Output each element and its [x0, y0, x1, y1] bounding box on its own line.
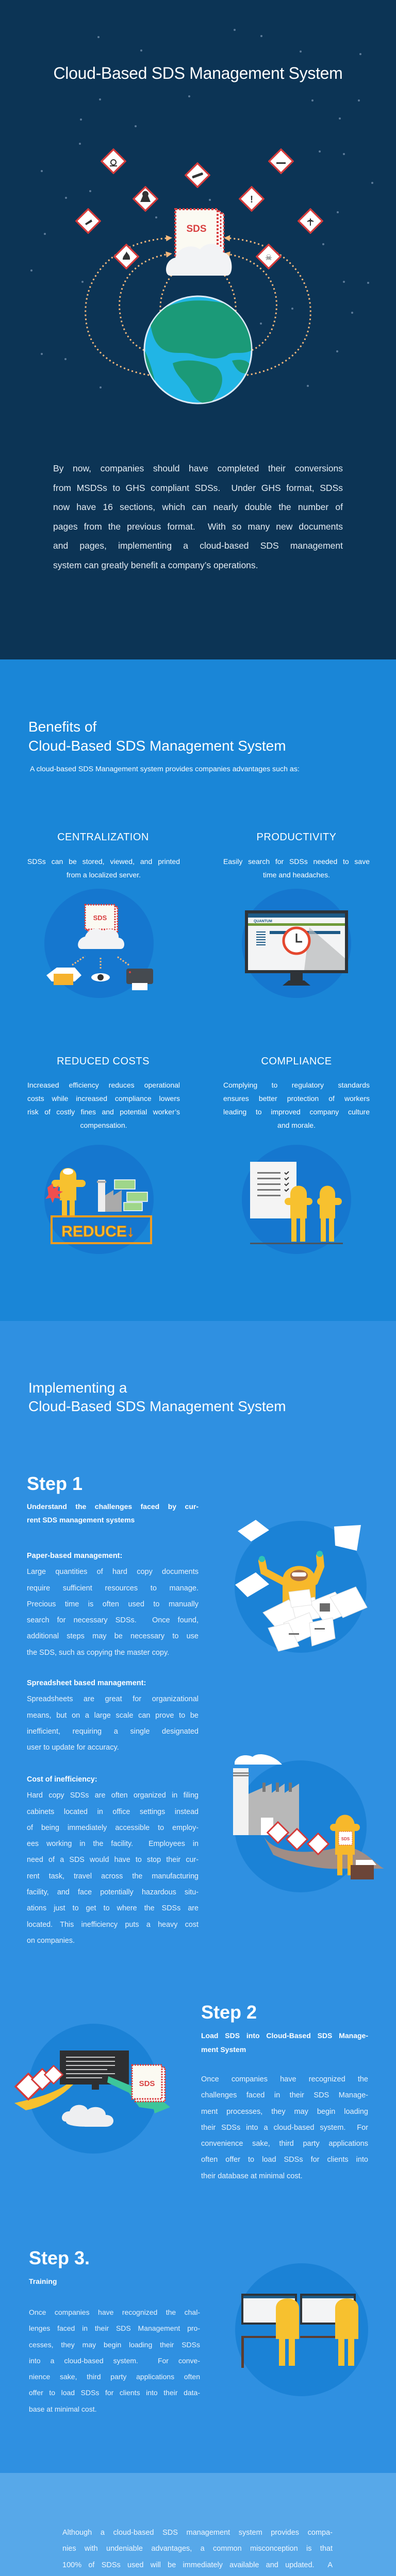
step 2 text: convenience sake, third party applications	[201, 2140, 368, 2148]
text: compliance: and morale.	[277, 1121, 316, 1129]
benefits heading: Benefits of	[28, 719, 96, 735]
text: cost of inefficiency: located. This inefficiency puts a heavy cost	[27, 1921, 199, 1929]
section: hero background	[0, 0, 396, 659]
text: cost of inefficiency: Hard copy SDSs are often organized in filing	[27, 1791, 199, 1800]
heading: reduced costs: REDUCED COSTS	[57, 1056, 150, 1067]
text: cost of inefficiency: need of a SDS would have to stop their cur-	[27, 1856, 199, 1864]
text: cost of inefficiency: rent task, travel across the manufacturing	[27, 1872, 199, 1880]
text: productivity	[223, 857, 370, 879]
closing paragraph: Although a cloud-based SDS management system provides compa-	[62, 2529, 333, 2537]
step 2 text: their database at minimal cost.	[201, 2172, 303, 2180]
heading: productivity: PRODUCTIVITY	[257, 832, 336, 843]
step 3 title: Step 3.	[29, 2247, 90, 2268]
text: compliance: leading to improved company culture	[223, 1108, 370, 1116]
intro paragraph: By now, companies should have completed their conversions	[53, 463, 343, 473]
intro paragraph: now have 16 sections, which can nearly double the number of	[53, 502, 343, 512]
icon: cloud server: SDS	[93, 914, 107, 922]
text: paper-based management: Large quantities of hard copy documents	[27, 1568, 199, 1576]
panel: centralization	[27, 832, 180, 998]
hazard diamonds	[76, 149, 322, 268]
text: productivity: Easily search for SDSs needed to save	[223, 857, 370, 866]
text: spreadsheet based management	[27, 1679, 199, 1752]
step 3 text: nience sake, third party applications often	[29, 2372, 200, 2381]
step 3 text: Once companies have recognized the chal-	[29, 2308, 200, 2316]
text: reduced costs: Increased efficiency reduces operational	[27, 1081, 180, 1089]
implementing heading: Cloud-Based SDS Management System	[28, 1398, 286, 1414]
illustration: training workers at computers	[235, 2263, 368, 2396]
text: paper-based management: search for necessary SDSs. Once found,	[27, 1616, 199, 1624]
text: spreadsheet based management: Spreadsheet based management:	[27, 1679, 146, 1687]
illustration: loading SDS into cloud: SDS	[139, 2079, 155, 2088]
text: centralization	[27, 857, 180, 879]
icon: reduce banner	[44, 1145, 154, 1254]
section: implementing background	[0, 1321, 396, 2473]
illustration: loading SDS into cloud	[14, 2024, 170, 2154]
text: reduced costs	[27, 1081, 180, 1129]
closing paragraph: nies with undeniable advantages, a common misconception is that	[62, 2545, 333, 2553]
SDS document: SDS	[186, 224, 207, 234]
text: centralization: from a localized server.	[67, 871, 141, 879]
text: paper-based management	[27, 1552, 199, 1657]
step 1 subtitle: Understand the challenges faced by cur-	[27, 1502, 199, 1511]
title: Cloud-Based SDS Management System	[53, 64, 343, 82]
text: paper-based management: additional steps may be necessary to use	[27, 1632, 199, 1640]
step 2 text	[201, 2075, 368, 2180]
text: paper-based management: Precious time is often used to manually	[27, 1600, 199, 1608]
text: reduced costs: costs while increased compliance lowers	[27, 1094, 180, 1103]
step 3 text: offer to load SDSs for clients into their data-	[29, 2388, 200, 2397]
text: productivity: time and headaches.	[263, 871, 330, 879]
step 2 text: Once companies have recognized the	[201, 2075, 368, 2083]
step 1 subtitle	[27, 1502, 199, 1524]
text: cost of inefficiency: Cost of inefficiency:	[27, 1775, 97, 1784]
text: cost of inefficiency: cabinets located in office settings instead	[27, 1808, 199, 1816]
text: cost of inefficiency	[27, 1775, 199, 1945]
text: compliance	[223, 1081, 370, 1129]
closing paragraph: 100% of SDSs used will be immediately available and updated. A	[62, 2561, 333, 2569]
icon: reduce banner: REDUCE↓	[61, 1223, 135, 1240]
step 2 text: challenges faced in their SDS Manage-	[201, 2091, 368, 2099]
panel: productivity	[223, 832, 370, 998]
panel: step 1	[27, 1473, 199, 1945]
step 3 text	[29, 2308, 200, 2413]
icon: monitor with clock: QUANTUM	[254, 920, 272, 923]
text: compliance: ensures better protection of workers	[223, 1094, 370, 1103]
step 2 subtitle	[201, 2031, 368, 2054]
globe	[144, 296, 252, 403]
intro paragraph: from MSDSs to GHS compliant SDSs. Under GHS format, SDSs	[53, 483, 343, 493]
intro paragraph: system can greatly benefit a company’s operations.	[53, 560, 258, 570]
SDS document	[175, 209, 224, 260]
heading: compliance: COMPLIANCE	[261, 1056, 332, 1067]
section: closing background	[0, 2473, 396, 2576]
step 2 text: ment processes, they may begin loading	[201, 2108, 368, 2116]
dotted orbits	[86, 238, 310, 376]
panel: step 3	[29, 2247, 200, 2413]
section: benefits background	[0, 659, 396, 1321]
benefits heading	[28, 719, 286, 754]
step 2 text: their SDSs into a cloud-based system. For	[201, 2124, 368, 2132]
step 3 text: base at minimal cost.	[29, 2405, 97, 2413]
step 1 title: Step 1	[27, 1473, 82, 1494]
text: spreadsheet based management: user to update for accuracy.	[27, 1743, 119, 1752]
step 3 subtitle: Training	[29, 2277, 57, 2285]
step 2 title: Step 2	[201, 2002, 257, 2023]
step 3 text: cesses, they may begin loading their SDSs	[29, 2341, 200, 2349]
icon: monitor with clock	[242, 889, 351, 998]
text: reduced costs: risk of costly fines and potential worker’s	[27, 1108, 180, 1116]
intro paragraph	[53, 463, 343, 570]
step 3 text: into a cloud-based system. For conve-	[29, 2357, 200, 2365]
step 2 text: often offer to load SDSs for clients into	[201, 2156, 368, 2164]
text: cost of inefficiency: on companies.	[27, 1937, 75, 1945]
implementing heading	[28, 1380, 286, 1414]
benefits subtitle: A cloud-based SDS Management system provides companies advantages such as:	[30, 765, 300, 773]
text: paper-based management: Paper-based management:	[27, 1552, 122, 1560]
text: cost of inefficiency: ees working in the facility. Employees in	[27, 1840, 199, 1848]
step 2 subtitle: ment System	[201, 2045, 246, 2054]
text: cost of inefficiency: facility, and face potentially hazardous situ-	[27, 1888, 199, 1896]
step 1 subtitle: rent SDS management systems	[27, 1516, 135, 1524]
intro paragraph: pages from the previous format. With so many new documents	[53, 521, 343, 532]
panel: compliance	[223, 1056, 370, 1254]
step 2 subtitle: Load SDS into Cloud-Based SDS Manage-	[201, 2031, 368, 2040]
closing paragraph	[62, 2529, 333, 2569]
benefits heading: Cloud-Based SDS Management System	[28, 738, 286, 754]
text: centralization: SDSs can be stored, viewed, and printed	[27, 857, 180, 866]
text: cost of inefficiency: of being immediately accessible to employ-	[27, 1824, 199, 1832]
illustration: factory with hazards: SDS	[341, 1837, 350, 1841]
step 3 text: lenges faced in their SDS Management pro-	[29, 2324, 200, 2332]
icon: checklist with workers	[242, 1145, 351, 1254]
hazard diamonds: !	[250, 194, 253, 205]
hazard diamonds: ☠	[265, 253, 272, 262]
panel: step 2	[201, 2002, 368, 2180]
implementing heading: Implementing a	[28, 1380, 127, 1396]
text: compliance: Complying to regulatory standards	[223, 1081, 370, 1089]
icon: cloud server	[44, 889, 154, 998]
text: spreadsheet based management: means, but on a large scale can prove to be	[27, 1711, 199, 1720]
heading: centralization: CENTRALIZATION	[57, 832, 149, 843]
intro paragraph: and pages, implementing a cloud-based SDS management	[53, 540, 343, 551]
cloud	[166, 244, 232, 276]
text: reduced costs: compensation.	[80, 1121, 127, 1129]
illustration: factory with hazards	[233, 1754, 384, 1892]
text: paper-based management: require sufficient resources to manage.	[27, 1584, 199, 1592]
panel: reduced costs	[27, 1056, 180, 1254]
text: paper-based management: the SDS, such as copying the master copy.	[27, 1649, 169, 1657]
hero illustration	[30, 29, 373, 404]
text: spreadsheet based management: inefficient, requiring a single designated	[27, 1727, 199, 1736]
text: cost of inefficiency: ations just to get to where the SDSs are	[27, 1904, 199, 1912]
text: spreadsheet based management: Spreadsheets are great for organizational	[27, 1695, 199, 1703]
